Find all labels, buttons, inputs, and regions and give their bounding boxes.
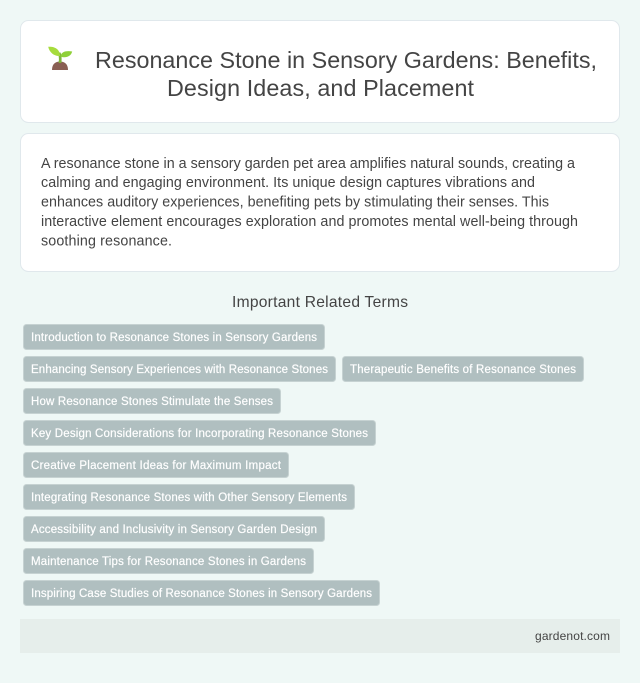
panel: description <box>20 134 620 272</box>
tag: how: How Resonance Stones Stimulate the Senses <box>31 396 273 408</box>
tag: design: Key Design Considerations for Incorporating Resonance Stones <box>31 428 368 440</box>
tag: maintenance <box>24 548 314 574</box>
panel: description: A resonance stone in a sensory garden pet area amplifies natural sounds, creating a <box>41 156 575 172</box>
tag: case studies: Inspiring Case Studies of Resonance Stones in Sensory Gardens <box>31 588 372 600</box>
footer: gardenot.com <box>535 629 610 643</box>
tag: design <box>24 420 376 446</box>
tag: enhancing <box>24 356 336 382</box>
footer <box>20 619 620 653</box>
tag: integrating <box>24 484 354 510</box>
tag: introduction: Introduction to Resonance Stones in Sensory Gardens <box>31 332 317 344</box>
tag: therapeutic: Therapeutic Benefits of Resonance Stones <box>350 364 576 376</box>
tag: enhancing: Enhancing Sensory Experiences with Resonance Stones <box>31 364 328 376</box>
tag: accessibility <box>24 516 324 542</box>
tag: how <box>24 388 280 414</box>
panel: description: enhances auditory experiences, benefiting pets by stimulating their senses. This <box>41 194 549 210</box>
tag: case studies <box>24 580 380 606</box>
panel: description: calming and engaging environment. Its unique design captures vibrations and <box>41 175 535 191</box>
icon: seedling <box>48 47 72 70</box>
title <box>95 47 597 101</box>
panel: title card <box>20 20 620 122</box>
tag: placement: Creative Placement Ideas for Maximum Impact <box>31 460 282 472</box>
tag: maintenance: Maintenance Tips for Resonance Stones in Gardens <box>31 556 306 568</box>
tag: accessibility: Accessibility and Inclusivity in Sensory Garden Design <box>31 524 317 536</box>
panel: description: soothing resonance. <box>41 234 172 250</box>
tag: integrating: Integrating Resonance Stones with Other Sensory Elements <box>31 492 347 504</box>
heading: important related terms: Important Related Terms <box>232 294 408 311</box>
title: Resonance Stone in Sensory Gardens: Benefits, <box>95 47 597 73</box>
tag: placement <box>24 452 288 478</box>
tag: introduction <box>24 324 324 350</box>
tag: therapeutic <box>342 356 584 382</box>
title: Design Ideas, and Placement <box>167 75 475 101</box>
panel: description: interactive element encourages exploration and promotes mental well-being through <box>41 214 578 230</box>
